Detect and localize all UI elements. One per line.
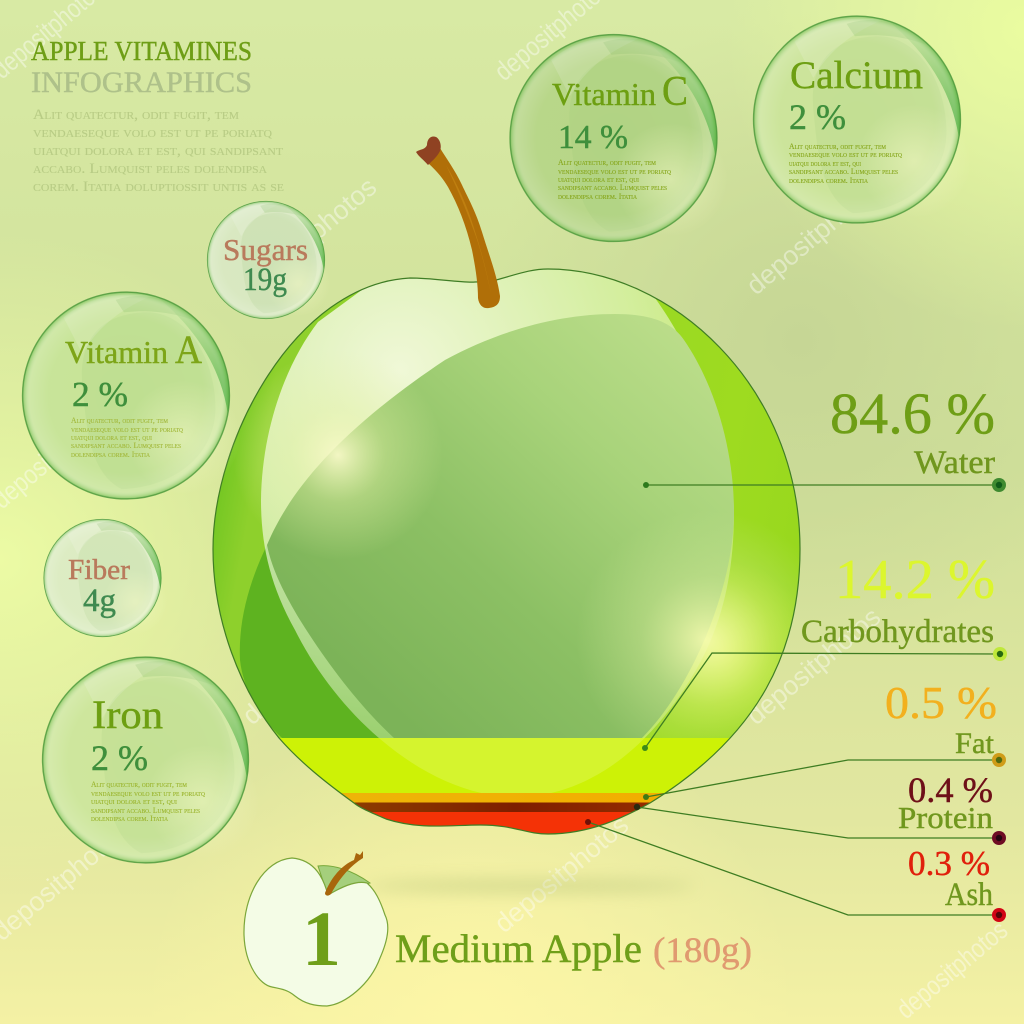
bubble: vitamin C: 14 %: [558, 119, 628, 156]
bubble: vitamin A: dolendipsa corem. Itatia: [71, 449, 151, 459]
stem: [325, 851, 363, 896]
bubble: vitamin C: vendaeseque volo est ut pe poriatq: [558, 166, 672, 176]
bubble: calcium: Alit quatectur, odit fugit, tem: [789, 141, 887, 151]
bubble: vitamin A: Alit quatectur, odit fugit, tem: [71, 415, 169, 425]
bubble: calcium: 2 %: [789, 97, 846, 137]
fat label: [885, 677, 997, 760]
apple slice: [244, 858, 388, 1006]
carbohydrates layer: [280, 738, 730, 793]
bubble: fiber: 4g: [83, 583, 116, 619]
bubble: vitamin C: Vitamin: [552, 76, 656, 112]
bubble: vitamin A: 2 %: [72, 375, 128, 414]
bubble: calcium: sandipsant accabo. Lumquist peles: [789, 166, 898, 176]
bubble: sugars: Sugars: [223, 232, 308, 267]
fat layer: [342, 793, 664, 802]
label lines: [588, 485, 1000, 915]
carbohydrates label: [801, 549, 995, 650]
bubble: iron: dolendipsa corem. Itatia: [91, 813, 169, 823]
bubble: vitamin C: Alit quatectur, odit fugit, tem: [558, 157, 657, 167]
bubble: calcium: dolendipsa corem. Itatia: [789, 175, 869, 185]
title: [31, 36, 252, 99]
bubble: vitamin A: [22, 292, 239, 499]
bubble: vitamin A: uiatqui dolora et est, qui: [71, 432, 152, 442]
bubble: vitamin C: C: [662, 69, 688, 115]
bubble: vitamin A: sandipsant accabo. Lumquist peles: [71, 440, 181, 450]
title: APPLE VITAMINES: [31, 36, 252, 66]
bubble: iron: [42, 657, 258, 863]
apple skin: [213, 269, 800, 834]
end markers: [992, 478, 1007, 922]
watermark: depositphotos: [237, 602, 382, 731]
intro text block: corem. Itatia doluptiossit untis as se: [33, 179, 284, 195]
bubble: vitamin C: [510, 34, 727, 242]
bubble: iron: sandipsant accabo. Lumquist peles: [91, 805, 200, 815]
bubble: vitamin A: vendaeseque volo est ut pe poriatq: [71, 424, 184, 434]
bubble: vitamin C: sandipsant accabo. Lumquist peles: [558, 182, 667, 192]
apple stem: [416, 136, 500, 308]
bubble: calcium: Calcium: [790, 54, 923, 97]
watermark: depositphotos: [489, 810, 634, 939]
serving caption: (180g): [653, 930, 752, 970]
bubble: sugars: 19g: [243, 262, 287, 298]
green cap: [318, 866, 370, 896]
ash label: Ash: [945, 877, 993, 913]
bubble: fiber: [44, 519, 167, 637]
intro text block: Alit quatectur, odit fugit, tem: [33, 107, 239, 123]
bubble: iron: vendaeseque volo est ut pe poriatq: [91, 788, 206, 798]
glass highlight ring: [261, 270, 734, 738]
carbohydrates label: Carbohydrates: [801, 614, 994, 650]
serving caption: Medium Apple: [395, 926, 642, 971]
number one: 1: [302, 895, 341, 982]
intro text block: [33, 107, 284, 195]
bubble: iron: Alit quatectur, odit fugit, tem: [91, 779, 188, 789]
water label: 84.6 %: [830, 381, 995, 446]
watermark: depositphotos: [491, 388, 636, 517]
highlight left: [242, 375, 429, 548]
lower left shade: [240, 545, 405, 738]
start dots: [585, 482, 649, 825]
water label: Water: [914, 445, 995, 481]
watermark: depositphotos: [741, 602, 886, 731]
watermark: depositphotos: [741, 172, 886, 301]
ash label: [908, 844, 993, 913]
watermark: depositphotos: [237, 172, 382, 301]
bubble: iron: 2 %: [91, 738, 148, 778]
carbohydrates label: 14.2 %: [835, 549, 995, 611]
bubble: vitamin C: dolendipsa corem. Itatia: [558, 191, 638, 201]
bubble: fiber: Fiber: [68, 554, 130, 586]
bubble: vitamin A: A: [175, 327, 202, 372]
bubble: iron: Iron: [92, 692, 163, 737]
bubble: iron: uiatqui dolora et est, qui: [91, 796, 177, 806]
serving caption: [395, 926, 752, 971]
protein label: [898, 770, 994, 835]
protein layer: [354, 802, 650, 812]
bubble: calcium: [754, 16, 970, 223]
intro text block: accabo. Lumquist peles dolendipsa: [33, 161, 267, 177]
intro text block: uiatqui dolora et est, qui sandipsant: [33, 143, 283, 159]
protein label: Protein: [898, 800, 994, 835]
water layer body: [267, 314, 734, 738]
bubble: sugars: [207, 201, 330, 319]
ash label: 0.3 %: [908, 844, 990, 883]
title: INFOGRAPHICS: [31, 66, 252, 99]
highlight right: [598, 526, 798, 738]
ash layer: [372, 812, 632, 834]
bubble: vitamin C: uiatqui dolora et est, qui: [558, 174, 639, 184]
main apple: [200, 262, 836, 842]
bubble: calcium: vendaeseque volo est ut pe poriatq: [789, 149, 903, 159]
protein label: 0.4 %: [908, 770, 993, 810]
fat label: 0.5 %: [885, 677, 997, 728]
bubble: vitamin A: Vitamin: [65, 334, 168, 370]
apple shadow: [365, 879, 695, 893]
intro text block: vendaeseque volo est ut pe poriatq: [33, 125, 272, 141]
bubble: calcium: uiatqui dolora et est, qui: [789, 158, 861, 168]
water label: [830, 381, 995, 481]
band glass overlay: [379, 738, 644, 793]
fat label: Fat: [955, 727, 995, 760]
rim glow: [679, 586, 789, 720]
small apple icon: [244, 851, 388, 1006]
apple outline: [213, 269, 800, 834]
